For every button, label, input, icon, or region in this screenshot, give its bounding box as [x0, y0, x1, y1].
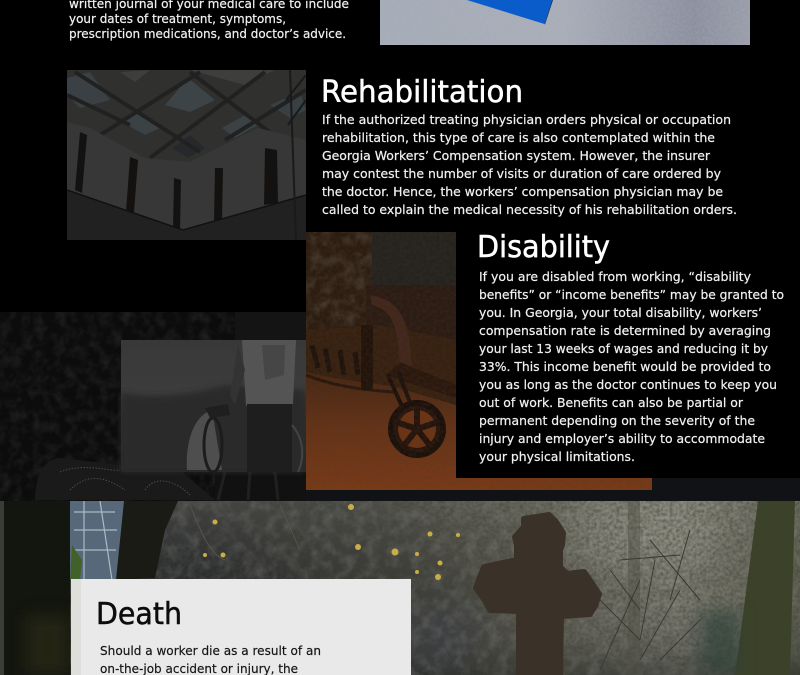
text block: rehabilitation body: Georgia Workers’ Compensation system. However, the insurer	[322, 149, 711, 164]
text block: rehabilitation body: may contest the number of visits or duration of care ordered by	[322, 167, 721, 182]
photo: stone cross in sunlit forest	[0, 500, 800, 675]
text block: disability body: you as long as the doctor continues to keep you	[479, 378, 777, 393]
text block: disability body: you. In Georgia, your total disability, workers’	[479, 306, 762, 321]
icon: stone cross	[476, 515, 599, 675]
panel: disability heading and text	[456, 230, 800, 478]
text block: rehabilitation body	[322, 113, 737, 218]
panel: medical treatment journal text: your dates of treatment, symptoms,	[69, 12, 286, 27]
panel: medical treatment journal text	[69, 0, 349, 42]
text block: disability body: If you are disabled from working, “disability	[479, 270, 751, 285]
photo: orange-toned wheelchair footrest	[306, 232, 652, 490]
text block: disability body	[479, 270, 784, 465]
text block: disability body: compensation rate is determined by averaging	[479, 324, 771, 339]
background photo: dark wheelchair wheels and foliage	[0, 312, 800, 501]
heading: Death: Death	[96, 597, 182, 632]
text block: disability body: your physical limitations.	[479, 450, 635, 465]
photo: dark architecture skylight ceiling	[67, 70, 306, 240]
text block: rehabilitation body: called to explain the medical necessity of his rehabilitation orders.	[322, 203, 737, 218]
panel: rehabilitation heading and text	[321, 75, 737, 218]
text block: death body: Should a worker die as a result of an	[100, 644, 321, 659]
panel: death	[71, 579, 411, 675]
text block: disability body: 33%. This income benefit would be provided to	[479, 360, 771, 375]
text block: disability body: permanent depending on the severity of the	[479, 414, 755, 429]
heading: Rehabilitation: Rehabilitation	[321, 75, 523, 110]
panel: medical treatment journal text: prescription medications, and doctor’s advice.	[69, 27, 346, 42]
photo: blue folder on grey wood desk	[380, 0, 750, 45]
text block: disability body: your last 13 weeks of wages and reducing it by	[479, 342, 768, 357]
text block: rehabilitation body: the doctor. Hence, the workers’ compensation physician may be	[322, 185, 723, 200]
text block: death body	[100, 644, 321, 675]
text block: disability body: injury and employer’s ability to accommodate	[479, 432, 765, 447]
heading: Disability: Disability	[477, 230, 610, 265]
text block: rehabilitation body: If the authorized treating physician orders physical or occupation	[322, 113, 731, 128]
text block: disability body: benefits” or “income benefits” may be granted to	[479, 288, 784, 303]
text block: disability body: out of work. Benefits can also be partial or	[479, 396, 744, 411]
inset photo: person standing beside wheelchair	[121, 340, 306, 472]
text block: rehabilitation body: rehabilitation, this type of care is also contemplated within the	[322, 131, 715, 146]
